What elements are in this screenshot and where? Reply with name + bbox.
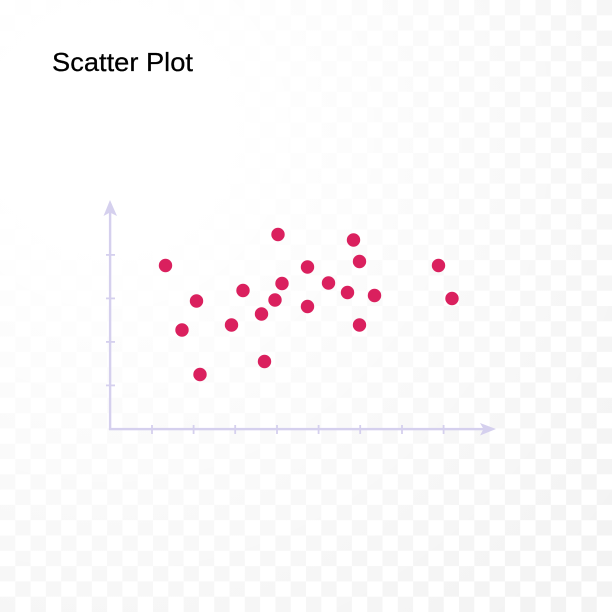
title: Scatter Plot [52, 47, 194, 77]
x axis with arrow [109, 423, 496, 436]
chart axes [104, 200, 496, 436]
data points [159, 228, 459, 381]
y axis with arrow [104, 200, 117, 430]
